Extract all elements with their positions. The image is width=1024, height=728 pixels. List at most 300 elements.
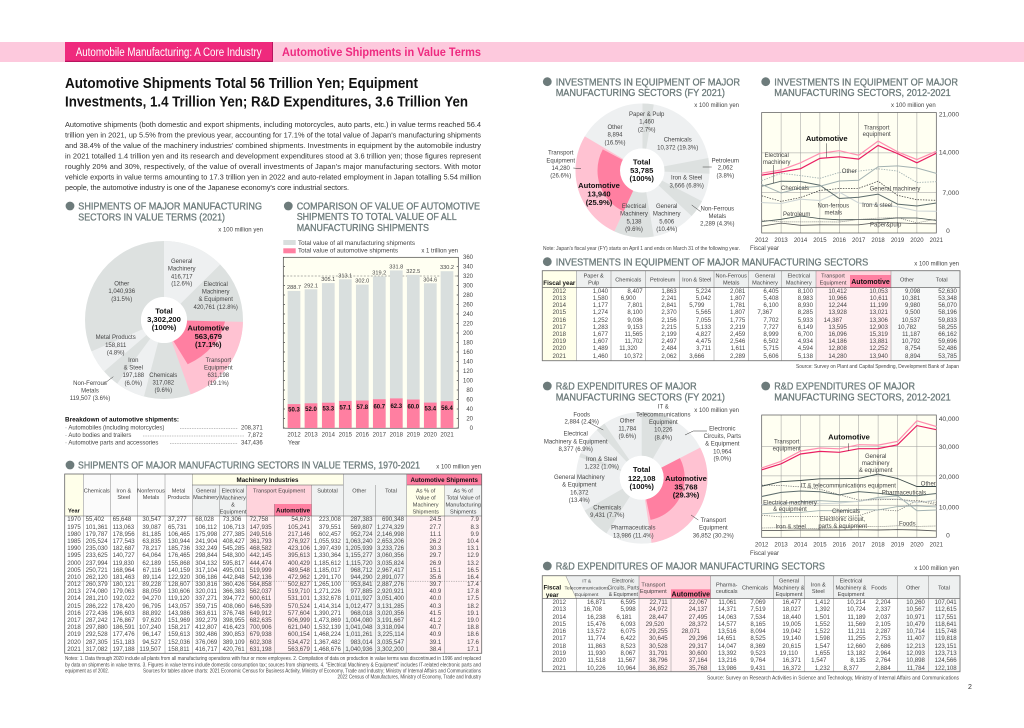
table header labels: Foods (871, 586, 887, 592)
x axis labels: 2015 (339, 432, 353, 438)
table body rows: 304,132 (195, 560, 217, 567)
table body rows: 4,934 (798, 338, 813, 345)
table body rows: 2017 (553, 324, 566, 331)
table body rows: 13,306 (869, 317, 888, 324)
series labels: Chemicals (832, 509, 860, 515)
series labels: equipment (773, 447, 801, 453)
header band (0, 42, 1024, 62)
x axis labels: Fiscal year (750, 246, 779, 252)
table body rows: 631,198 (250, 646, 272, 653)
series labels: Transport (774, 440, 800, 446)
source: Source: Survey on Research Activities in Science and Technology, Ministry of Internal Affairs and Communications (707, 676, 959, 682)
plot frame and grid (762, 112, 936, 233)
table body rows: 5,606 (763, 353, 779, 360)
table body rows: 390,853 (223, 631, 245, 638)
table body rows: 1,011,261 (346, 631, 373, 638)
donut labels: 317,082 (152, 380, 175, 386)
table body rows: 2015 (553, 309, 566, 316)
table body rows: 13,516 (718, 628, 737, 635)
table body rows: 1,468,676 (314, 646, 341, 653)
table body rows: 14,387 (824, 317, 842, 324)
heading (543, 77, 740, 99)
table body rows: 1,677 (593, 331, 608, 338)
table header labels: & (231, 502, 235, 508)
table body rows: 1,055,932 (314, 538, 341, 545)
table header labels: Machinery Industries (237, 477, 299, 484)
table body rows: 502,627 (288, 581, 310, 588)
table body rows: 10,971 (906, 614, 925, 621)
table body rows: 26.9 (429, 560, 441, 567)
table body rows: 11,199 (870, 302, 888, 309)
series labels: Petroleum (783, 212, 810, 218)
total value labels: 322.5 (406, 269, 420, 275)
table body rows: 2005 (67, 567, 81, 574)
table body rows: 8,165 (750, 621, 766, 628)
heading: SHIPMENTS OF MAJOR MANUFACTURING SECTORS IN VALUE TERMS, 1970-2021 (78, 460, 420, 471)
donut labels: Chemicals (593, 506, 621, 512)
x axis labels: 2015 (813, 542, 827, 548)
table header labels: Machinery & (835, 586, 867, 592)
table body rows: 1,271,226 (314, 588, 341, 595)
table body rows: 16,096 (828, 331, 847, 338)
table body rows: 73,306 (223, 516, 241, 523)
table body rows: 66,162 (938, 331, 957, 338)
table body rows: 1995 (67, 552, 81, 559)
table body rows: 17.5 (467, 595, 479, 602)
panel: shipments table 1970-2021 (64, 460, 482, 680)
table body rows: 16,477 (782, 599, 801, 606)
table body rows: 35.6 (429, 574, 441, 581)
table header labels: Total Value of (446, 495, 480, 501)
table body rows: 5,224 (696, 288, 711, 295)
x axis labels: 2018 (871, 542, 885, 548)
donut labels (544, 405, 741, 539)
table body rows: 1,115,720 (346, 560, 373, 567)
automotive value labels: 60.7 (373, 404, 386, 410)
table body rows: 260,379 (86, 581, 108, 588)
table body rows: 577,604 (288, 610, 310, 617)
table body rows: 5,998 (620, 606, 636, 613)
table body rows: 3,711 (696, 345, 711, 352)
table body rows: 64,064 (142, 552, 161, 559)
table body rows: 29,317 (689, 643, 707, 650)
table body rows: 1,807 (730, 295, 745, 302)
table header labels: year (546, 592, 559, 599)
donut labels: & Equipment (562, 483, 597, 489)
table body rows: 3,131,285 (377, 603, 404, 610)
donut labels: Petroleum (712, 158, 739, 164)
table body rows: 602,308 (250, 639, 272, 646)
breakdown of automotive shipments: · Automotive parts and accessories (65, 440, 158, 446)
table body rows: 363,611 (195, 610, 217, 617)
table body rows: 2,105 (875, 621, 891, 628)
series labels: Electrical machinery (763, 500, 817, 506)
table body rows: 176,867 (113, 617, 135, 624)
table body rows: 2,156 (661, 317, 677, 324)
donut labels: Iron (128, 358, 138, 364)
table header labels: Electrical (222, 488, 244, 494)
table body rows: 237,994 (86, 560, 108, 567)
table body rows: 2018 (553, 643, 566, 650)
title: Investments, 1.4 Trillion Yen; R&D Expenditures, 3.6 Trillion Yen (65, 94, 468, 110)
table body rows: 563,679 (288, 646, 310, 653)
table body rows: 14,371 (718, 606, 737, 613)
table header labels: Telecommunications (565, 586, 609, 592)
automotive value labels: 53.3 (322, 406, 335, 412)
table body rows: 37,277 (168, 516, 187, 523)
donut labels: Electronic (709, 426, 735, 432)
panel: comparison bar chart (282, 202, 480, 446)
table body rows: 24,972 (649, 606, 668, 613)
automotive label (578, 181, 620, 207)
table body rows: 2,764 (875, 657, 891, 664)
table body rows: 1,012,477 (345, 603, 373, 610)
automotive label: (25.9%) (586, 198, 613, 207)
table body rows: 106,713 (223, 524, 245, 531)
x axis labels: Year (288, 440, 300, 446)
table body rows: 1,332,678 (314, 595, 341, 602)
title (65, 75, 468, 110)
legend (283, 240, 415, 254)
notes and sources: equipment as of 2002. (65, 668, 109, 674)
table body rows: 646,539 (250, 603, 272, 610)
table body rows: 2,370 (661, 309, 677, 316)
table body rows: 217,146 (288, 531, 310, 538)
table header labels: Steel (812, 589, 825, 595)
table header labels (544, 579, 950, 599)
donut labels: (26.6%) (550, 173, 571, 179)
x axis labels (750, 238, 944, 252)
table header labels: Shipments (412, 509, 439, 515)
donut labels: Equipment (649, 420, 678, 426)
table body rows: 6,700 (798, 331, 813, 338)
section subtitle: Automotive Shipments in Value Terms (282, 47, 481, 59)
y axis labels: 20 (466, 416, 474, 422)
table body rows: 8,285 (798, 309, 813, 316)
table body rows: 320,011 (195, 588, 217, 595)
table body rows: 360,426 (223, 581, 245, 588)
donut labels: 416,717 (171, 274, 193, 280)
table body rows: 562,037 (250, 588, 272, 595)
table body rows: 11.1 (430, 531, 441, 538)
table header labels: Metal (172, 488, 185, 494)
table body rows: 13,216 (718, 657, 737, 664)
table header labels: General (196, 488, 216, 494)
table header labels: Chemicals (615, 277, 642, 283)
table body rows: 17.6 (467, 639, 479, 646)
series labels (763, 126, 920, 228)
table body rows: 11,061 (718, 599, 737, 606)
table body rows: 2016 (67, 610, 81, 617)
donut centre total (629, 158, 654, 183)
table body rows: 41.2 (429, 617, 441, 624)
x axis labels: 2018 (871, 238, 885, 244)
series labels: General (865, 454, 886, 460)
table body rows: 29,255 (649, 628, 668, 635)
table body rows: 30,528 (649, 643, 668, 650)
automotive value labels: 60.0 (407, 404, 420, 410)
table body rows: 376,069 (195, 639, 217, 646)
table body rows: 366,383 (223, 588, 245, 595)
table header labels: Iron & Steel (682, 277, 711, 283)
table body rows: 112,615 (935, 606, 957, 613)
donut labels: Other (620, 419, 635, 425)
table body rows: 205,524 (86, 538, 108, 545)
donut labels: (10.4%) (656, 227, 677, 233)
table body rows: 1,185,612 (314, 560, 341, 567)
table body rows: 1,011,927 (346, 595, 373, 602)
table body rows: 944,290 (351, 574, 373, 581)
table body rows: 13,986 (718, 665, 737, 672)
unit: x 1 trillion yen (421, 248, 458, 254)
automotive label: Automotive (665, 474, 707, 483)
panel: investments in equipment pie FY2021 (542, 77, 740, 252)
table body rows: 19,005 (782, 621, 801, 628)
table body rows: 1,532,139 (314, 624, 341, 631)
table body rows: 39.7 (429, 581, 441, 588)
automotive label: (17.1%) (195, 340, 222, 349)
table body rows: 9,523 (750, 650, 766, 657)
table body rows: 89,114 (143, 574, 161, 581)
table body rows: 2,199 (661, 331, 677, 338)
donut labels: Other (607, 125, 623, 131)
x axis labels: 2020 (910, 238, 924, 244)
table body rows: 29,296 (689, 635, 707, 642)
table body rows: 30,547 (142, 516, 161, 523)
table body rows: 1,274 (593, 309, 608, 316)
table body rows: 94,270 (142, 595, 161, 602)
donut labels: 8,377 (6.9%) (559, 447, 593, 453)
notes and sources: 2022 Census of Manufactures, Ministry of Economy, Trade and Industry (338, 674, 481, 680)
table body rows: 89,228 (142, 581, 161, 588)
table body rows: 2,215 (661, 324, 677, 331)
table body rows: 223,008 (319, 516, 341, 523)
donut centre total: (100%) (152, 323, 177, 332)
table body rows: 12,808 (828, 345, 847, 352)
x axis labels: 2021 (930, 238, 944, 244)
table body rows: 11,774 (588, 635, 606, 642)
series labels: Paper&pulp (870, 222, 902, 228)
table body rows: 101,361 (86, 524, 108, 531)
donut labels: (6.0%) (124, 381, 142, 387)
y axis labels: 80 (466, 388, 474, 394)
table body rows: 155,868 (168, 560, 190, 567)
automotive label: 563,679 (195, 332, 222, 341)
table backgrounds (542, 271, 960, 361)
table body rows: 5,042 (696, 295, 711, 302)
table body rows: 107,240 (139, 624, 161, 631)
table body rows: 1,040,936 (345, 646, 373, 653)
table body rows (552, 288, 957, 360)
table body rows: 7,702 (763, 317, 779, 324)
table body rows: 10,782 (898, 324, 916, 331)
table body rows: 13,881 (869, 338, 888, 345)
table body rows: 159,613 (168, 631, 190, 638)
heading (543, 382, 725, 403)
series labels: & equipment (859, 468, 893, 474)
table header labels: Electrical (787, 274, 810, 280)
table body rows: 20,615 (782, 643, 801, 650)
panel: investments in equipment line chart 2012-2021 (750, 77, 959, 252)
y axis labels: 340 (463, 264, 474, 270)
table body rows: 1,330,364 (314, 552, 341, 559)
donut labels: IT & (658, 405, 669, 411)
donut labels: 9,431 (7.7%) (590, 513, 624, 519)
table body rows: 26.2 (429, 538, 441, 545)
section tab: Automobile Manufacturing: Automobile Manufacturing: A Core Industry (76, 47, 262, 59)
table body rows: 186,591 (113, 624, 135, 631)
donut labels: Metal Products (96, 335, 136, 341)
x axis labels: 2018 (390, 432, 404, 438)
table header labels: Subtotal (317, 488, 338, 494)
line series (762, 141, 936, 226)
table body rows: 2013 (553, 295, 566, 302)
table body rows: 11,187 (902, 331, 920, 338)
table body rows: 151,969 (168, 617, 190, 624)
series labels: Pharmaceuticals (882, 490, 926, 496)
table body rows: 2018 (553, 331, 566, 338)
table body rows: 10,964 (617, 665, 636, 672)
table body rows: 2020 (553, 657, 566, 664)
donut labels: (16.5%) (604, 140, 626, 146)
table body rows: 151,183 (113, 639, 135, 646)
table body rows: 18.2 (467, 603, 479, 610)
donut labels: Equipment (699, 526, 728, 532)
automotive value labels: 50.3 (288, 408, 300, 414)
table body rows: 2,081 (730, 288, 745, 295)
table header labels (543, 274, 948, 287)
table body rows: 53,785 (938, 353, 957, 360)
series labels: Automotive (828, 432, 870, 442)
table body rows: 9,153 (627, 324, 643, 331)
donut labels: Transport (701, 518, 726, 524)
table header labels: & Equipment (609, 592, 638, 598)
donut labels: (3.8%) (716, 173, 734, 179)
intro text block: in 2021 totalled 1.4 trillion yen and its research and development expenditures stood at 3.6 trillion yen; those figures represent (65, 152, 481, 160)
table body rows: 379,551 (319, 524, 341, 531)
heading: MANUFACTURING SECTORS (FY 2021) (556, 88, 725, 99)
x axis labels: 2012 (287, 432, 301, 438)
donut labels: Iron & Steel (586, 457, 617, 463)
panel: investments in equipment table (542, 257, 960, 370)
table body rows: 4,594 (798, 345, 813, 352)
table body rows: 1,501 (815, 614, 830, 621)
legend: Total value of all manufacturing shipments (298, 241, 415, 247)
table body rows: 37,164 (689, 657, 707, 664)
donut labels: Paper & Pulp (629, 112, 665, 118)
table body rows: 123,713 (935, 650, 957, 657)
table body rows: 2020 (67, 639, 81, 646)
table header labels: Transport (641, 582, 666, 588)
y axis labels: 14,000 (939, 150, 959, 156)
table body rows: 2,753 (875, 635, 891, 642)
table header labels: ceuticals (716, 589, 738, 595)
donut labels: 2,062 (718, 166, 733, 172)
table body rows: 392,486 (195, 631, 217, 638)
table body rows: 317,104 (195, 567, 217, 574)
donut labels: General Machinery (554, 475, 605, 481)
table body rows: 564,858 (250, 581, 272, 588)
table body rows: 8,135 (850, 657, 866, 664)
table body rows: 30,600 (689, 650, 707, 657)
table body rows: 12,213 (906, 643, 925, 650)
table body rows: 1,283 (593, 324, 608, 331)
table body rows: 977,885 (351, 588, 373, 595)
table body rows: 1,205,939 (345, 545, 373, 552)
table body rows: 3,035,547 (377, 639, 404, 646)
table header labels: Fiscal (544, 584, 561, 592)
series labels: IT & telecommunications equipment (801, 484, 896, 490)
table body rows: 130,944 (168, 538, 190, 545)
y axis labels (939, 112, 959, 235)
table body rows: 6,422 (620, 635, 636, 642)
donut labels: (2.7%) (638, 127, 656, 133)
table body rows: 5,715 (763, 345, 779, 352)
y axis labels: 120 (463, 369, 474, 375)
breakdown of automotive shipments: Breakdown of automotive shipments: (65, 418, 179, 424)
y axis labels (939, 416, 959, 540)
breakdown of automotive shipments: 347,436 (241, 440, 263, 446)
series labels: machinery (763, 160, 791, 166)
page number: 2 (968, 684, 972, 691)
table body rows: 2,062 (661, 353, 677, 360)
table body rows: 147,935 (250, 524, 272, 531)
table body rows: 394,772 (223, 595, 245, 602)
table body rows: 2014 (553, 302, 566, 309)
donut labels: 631,198 (207, 373, 230, 379)
table body rows: 7,367 (757, 309, 773, 316)
table header labels: Equipment (640, 589, 667, 595)
table body rows: 2017 (67, 617, 81, 624)
breakdown of automotive shipments: 7,872 (248, 433, 263, 439)
table body rows: 1,781 (730, 302, 745, 309)
x axis labels (287, 432, 454, 446)
table body rows: 24,137 (689, 606, 707, 613)
table body rows: 649,912 (250, 610, 272, 617)
table body rows: 10,567 (906, 606, 925, 613)
table body rows: 12,252 (869, 345, 888, 352)
table header labels: Equipment (220, 509, 247, 515)
table body rows: 235,030 (86, 545, 108, 552)
table body rows: 11,255 (847, 635, 866, 642)
table body rows: 1,775 (730, 317, 745, 324)
donut labels: (9.0%) (713, 457, 731, 463)
table body rows: 11,565 (624, 331, 643, 338)
y axis labels: 140 (463, 360, 474, 366)
table body rows: 40.9 (429, 631, 441, 638)
x axis labels: 2013 (774, 238, 788, 244)
donut centre total (147, 306, 181, 332)
x axis labels: 2013 (304, 432, 318, 438)
table body rows: 2,484 (661, 345, 677, 352)
table body rows: 40.3 (429, 603, 441, 610)
automotive value labels: 62.3 (390, 404, 403, 410)
source: Source: Survey on Plant and Capital Spending, Development Bank of Japan (796, 364, 959, 370)
table body rows: 128,607 (168, 581, 190, 588)
table body rows: 531,101 (288, 595, 310, 602)
x axis labels: 2019 (891, 542, 905, 548)
table body rows: 6,595 (620, 599, 636, 606)
table header labels: Chemicals (742, 586, 768, 592)
table body rows: 8,067 (620, 650, 636, 657)
table body rows: 16.4 (467, 574, 479, 581)
table body rows: 241,904 (195, 538, 217, 545)
table body rows: 10,898 (906, 657, 925, 664)
x axis labels: 2016 (833, 238, 847, 244)
automotive label (187, 324, 229, 349)
donut centre total: (100%) (629, 174, 654, 183)
table body rows: 4,827 (696, 331, 711, 338)
